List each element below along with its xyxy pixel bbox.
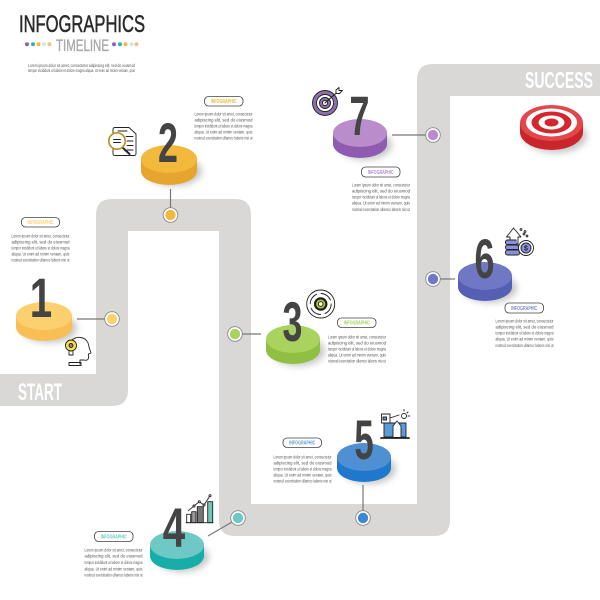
label pill 4 — [94, 532, 133, 542]
text block 6: Lorem ipsum dolor sit amet, consectetur — [496, 319, 554, 324]
text block 3: aliqua. Ut enim ad minim veniam, quis — [328, 353, 386, 358]
text block 2: aliqua. Ut enim ad minim veniam, quis — [194, 130, 253, 135]
label pill 3 — [338, 318, 376, 328]
connector and node 1 — [77, 312, 119, 326]
text block 4: nostrud exercitation ullamco laboris nisi ut — [84, 573, 143, 578]
text block 7 — [352, 183, 410, 212]
number 4: 4 — [163, 498, 185, 560]
icon: gear with orbit — [307, 290, 335, 318]
text block 3: adipiscing elit, sed do eiusmod — [328, 341, 386, 346]
intro text: tempor incididunt ut labore et dolore magna aliqua. Ut enim ad minim veniam, quis — [28, 68, 135, 73]
disc 2 — [141, 145, 202, 186]
panel: step 4 — [84, 495, 245, 578]
decorative dots — [25, 42, 138, 46]
road path — [0, 64, 600, 536]
text block 5: nostrud exercitation ullamco laboris nisi ut — [274, 479, 332, 484]
text block 7: nostrud exercitation ullamco laboris nisi ut — [352, 207, 410, 212]
text block 2: tempor incididunt ut labore et dolore magna — [194, 124, 253, 129]
text block 4: Lorem ipsum dolor sit amet, consectetur — [84, 548, 143, 553]
text block 7: adipiscing elit, sed do eiusmod — [352, 189, 410, 194]
connector and node 6 — [426, 272, 455, 286]
text block 4: aliqua. Ut enim ad minim veniam, quis — [84, 566, 143, 571]
number 3: 3 — [283, 290, 302, 353]
text block 5: tempor incididunt ut labore et dolore magna — [274, 467, 332, 472]
icon: head with lightbulb — [66, 337, 91, 366]
text block 7: aliqua. Ut enim ad minim veniam, quis — [352, 201, 410, 206]
panel: step 1 — [12, 218, 119, 366]
icon: document with magnifier — [109, 128, 136, 156]
number 5: 5 — [354, 409, 374, 471]
connector and node 3 — [228, 327, 261, 341]
disc 6 — [458, 262, 517, 303]
text block 7: tempor incididunt ut labore et dolore magna — [352, 195, 410, 200]
number 2: 2 — [158, 111, 178, 174]
start label: START — [18, 379, 62, 406]
heading: infographics: INFOGRAPHICS — [19, 11, 145, 38]
text block 6 — [496, 319, 554, 348]
title block — [19, 11, 145, 73]
target disc — [520, 105, 587, 153]
text block 2: adipiscing elit, sed do eiusmod — [194, 118, 253, 123]
icon: presenter at screen — [381, 410, 410, 438]
panel: step 6 — [426, 227, 554, 348]
connector and node 4 — [208, 511, 245, 536]
label pill 1 — [22, 218, 60, 227]
text block 1 — [12, 234, 70, 263]
text block 3 — [328, 335, 386, 364]
number 6: 6 — [475, 227, 494, 290]
disc 7 — [333, 119, 392, 160]
text block 1: aliqua. Ut enim ad minim veniam, quis — [12, 252, 70, 257]
label pill 2: INFOGRAPHIC — [211, 99, 237, 105]
label pill 1: INFOGRAPHIC — [28, 220, 54, 226]
panel: step 2 — [109, 96, 253, 222]
connector and node 2 — [163, 189, 178, 222]
text block 6: aliqua. Ut enim ad minim veniam, quis — [496, 337, 554, 342]
label pill 3: INFOGRAPHIC — [344, 320, 370, 326]
icon: target with arrow — [312, 88, 342, 116]
connector and node 7 — [392, 128, 440, 142]
text block 1: nostrud exercitation ullamco laboris nisi ut — [12, 258, 70, 263]
text block 3: Lorem ipsum dolor sit amet, consectetur — [328, 335, 386, 340]
text block 2: nostrud exercitation ullamco laboris nisi ut — [194, 136, 253, 141]
text block 5: Lorem ipsum dolor sit amet, consectetur — [274, 455, 332, 460]
number 7: 7 — [350, 84, 369, 147]
text block 2: Lorem ipsum dolor sit amet, consectetur — [194, 112, 253, 117]
text block 6: nostrud exercitation ullamco laboris nisi ut — [496, 343, 554, 348]
text block 4: tempor incididunt ut labore et dolore magna — [84, 560, 143, 565]
label pill 5: INFOGRAPHIC — [289, 440, 315, 446]
text block 1: Lorem ipsum dolor sit amet, consectetur — [12, 234, 70, 239]
panel: step 7 — [312, 84, 440, 212]
text block 3: tempor incididunt ut labore et dolore magna — [328, 347, 386, 352]
subheading: timeline: TIMELINE — [56, 37, 109, 55]
text block 5: adipiscing elit, sed do eiusmod — [274, 461, 332, 466]
text block 3: nostrud exercitation ullamco laboris nisi ut — [328, 359, 386, 364]
intro text: Lorem ipsum dolor sit amet, consectetur adipiscing elit, sed do eiusmod — [28, 63, 135, 68]
dollar sign: $ — [524, 246, 528, 252]
text block 1: tempor incididunt ut labore et dolore magna — [12, 246, 70, 251]
text block 1: adipiscing elit, sed do eiusmod — [12, 240, 70, 245]
text block 7: Lorem ipsum dolor sit amet, consectetur — [352, 183, 410, 188]
disc 1 — [16, 302, 77, 343]
panel: step 3 — [228, 290, 386, 366]
panel: step 5 — [274, 409, 410, 525]
label pill 4: INFOGRAPHIC — [101, 534, 127, 540]
text block 4 — [84, 548, 143, 578]
label pill 2 — [204, 96, 243, 106]
disc 3 — [266, 325, 325, 366]
text block 6: tempor incididunt ut labore et dolore magna — [496, 331, 554, 336]
label pill 6: INFOGRAPHIC — [511, 306, 537, 312]
intro text — [28, 63, 135, 73]
disc 4 — [150, 531, 209, 572]
disc 5 — [337, 443, 396, 484]
text block 4: adipiscing elit, sed do eiusmod — [84, 554, 143, 559]
text block 6: adipiscing elit, sed do eiusmod — [496, 325, 554, 330]
connector and node 5 — [356, 485, 370, 525]
label pill 7: INFOGRAPHIC — [368, 170, 394, 176]
text block 2 — [194, 112, 253, 141]
icon: arrow with coins — [506, 228, 534, 256]
text block 5 — [274, 455, 332, 484]
icon: bar chart with trend — [186, 495, 213, 523]
number 1: 1 — [30, 268, 52, 330]
text block 5: aliqua. Ut enim ad minim veniam, quis — [274, 473, 332, 478]
